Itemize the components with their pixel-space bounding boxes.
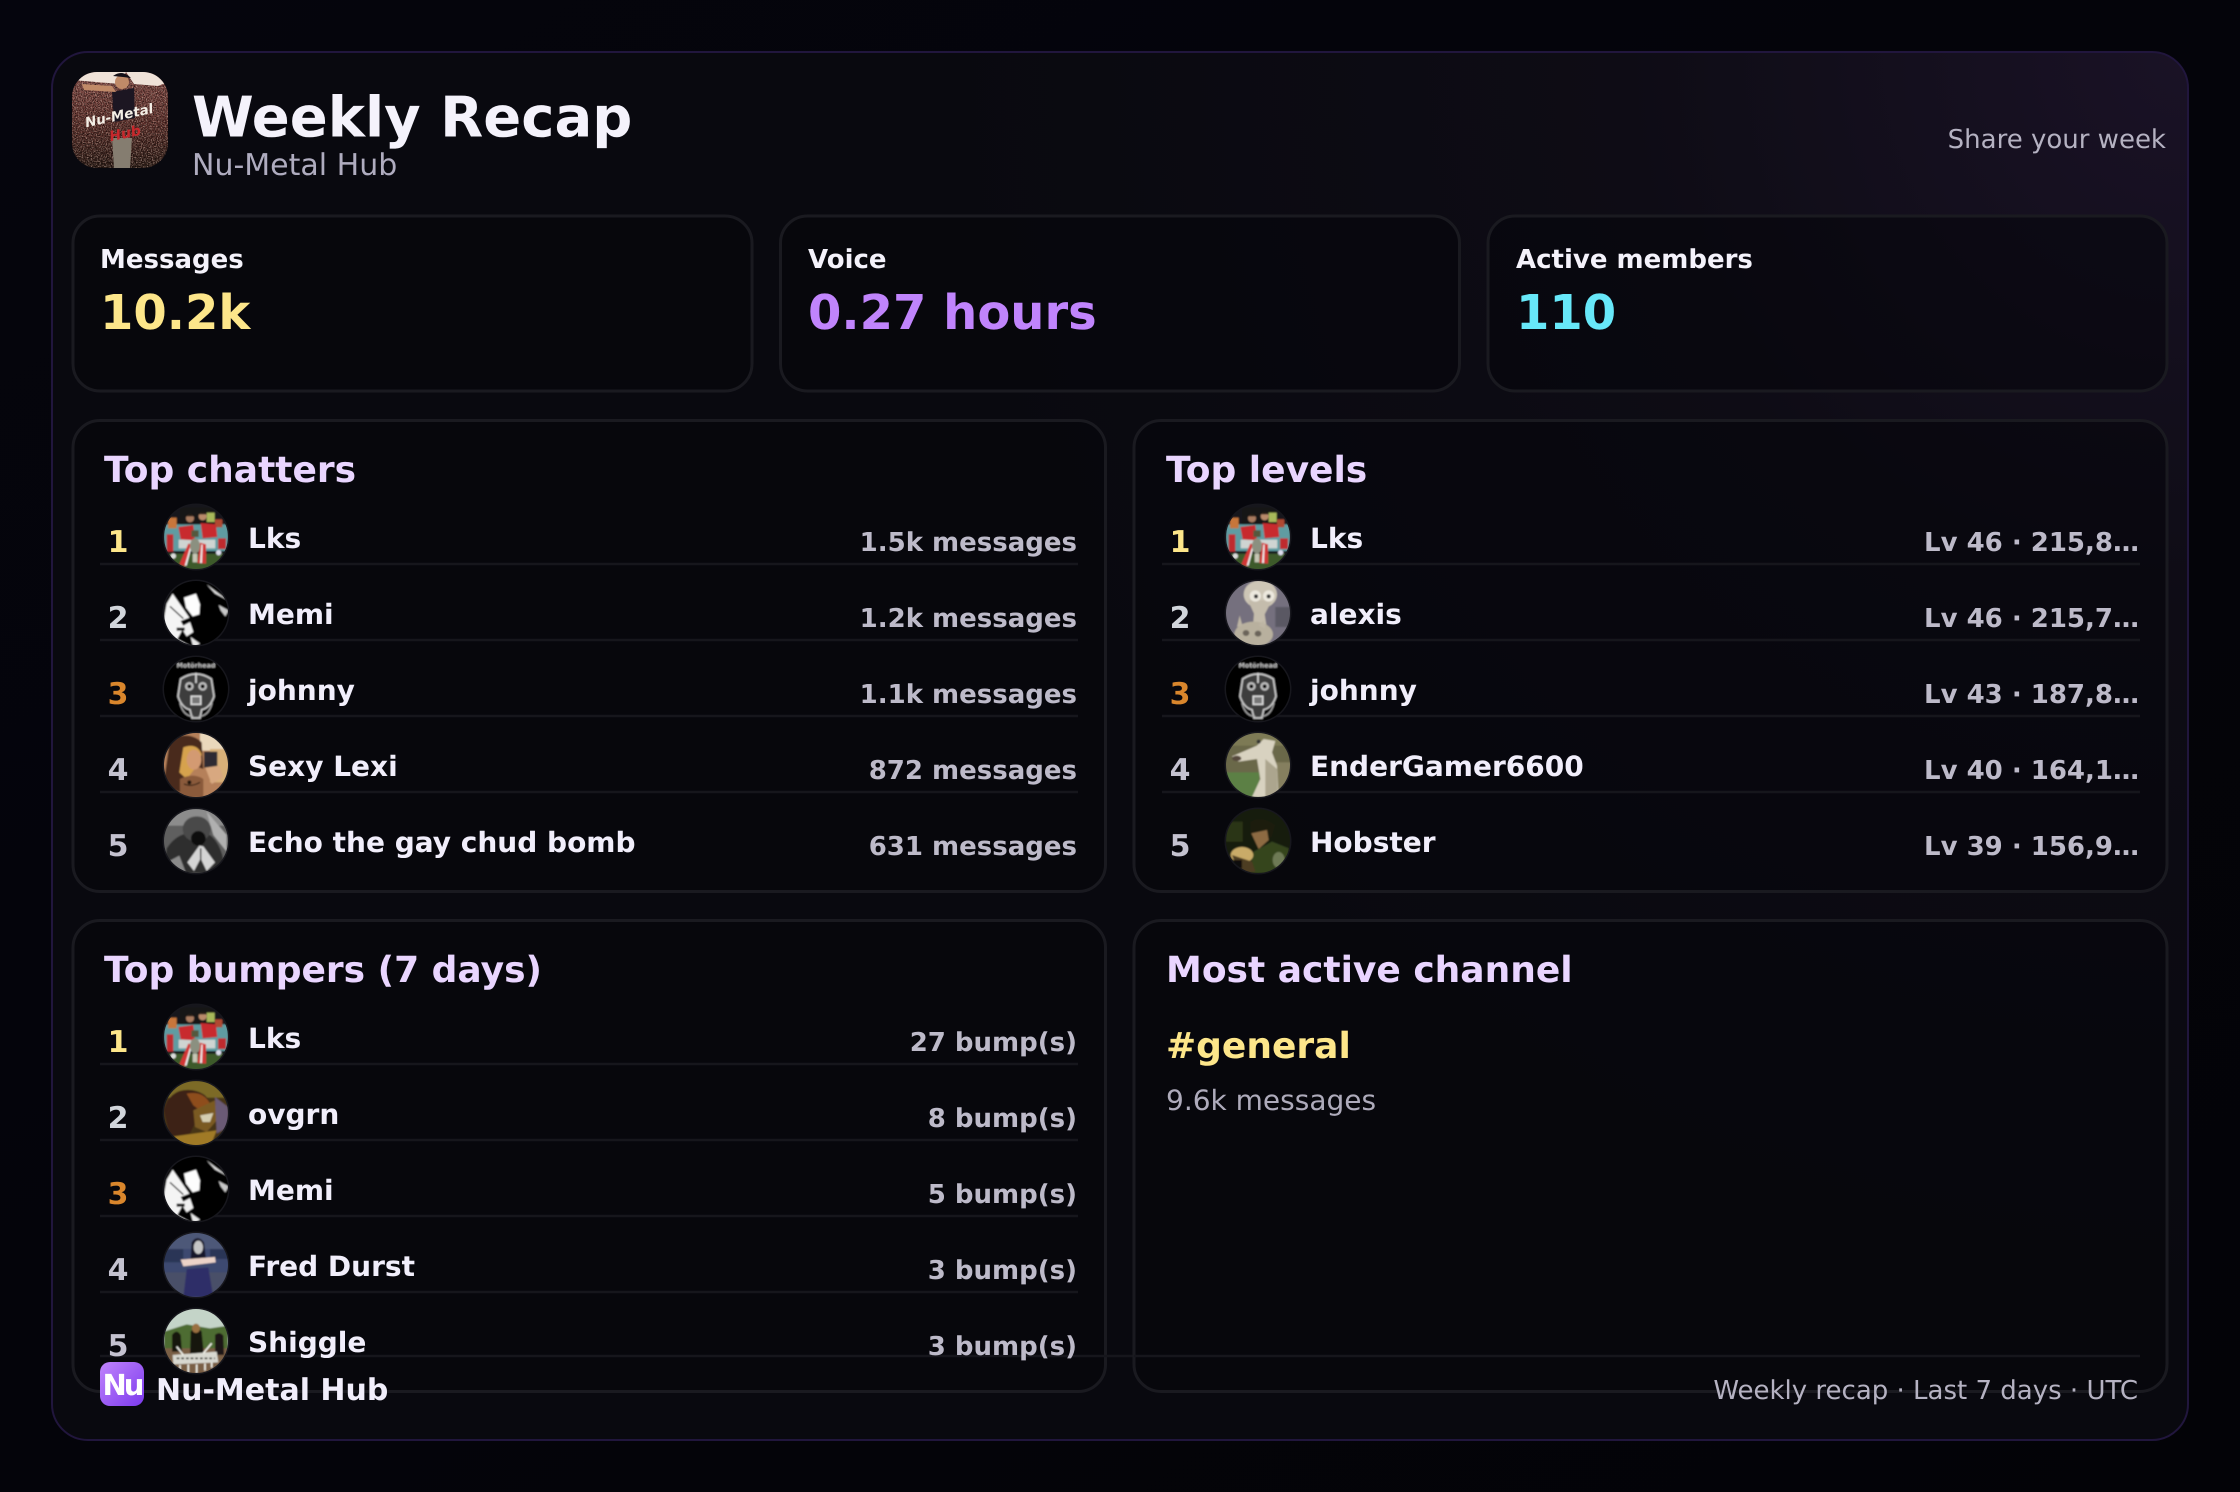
row: Memi: 3 (108, 1177, 128, 1212)
stat card: messages: Messages (100, 245, 244, 275)
row: Sexy Lexi: 872 messages (869, 756, 1077, 786)
row: alexis: alexis (1310, 598, 1402, 631)
row: Memi: Memi (248, 598, 334, 631)
row: Lks: 1.5k messages (860, 528, 1077, 558)
row: Shiggle: Shiggle (248, 1326, 366, 1359)
row: ovgrn: 8 bump(s) (928, 1104, 1077, 1134)
panel: top bumpers (73, 920, 1134, 1392)
row: alexis: Lv 46 · 215,7… (1924, 604, 2139, 634)
stat card: voice (780, 216, 1460, 391)
row: Memi: 2 (108, 601, 128, 636)
row: Lks (108, 1001, 1077, 1074)
row: Hobster: Hobster (1310, 826, 1436, 859)
row: johnny: 1.1k messages (860, 680, 1077, 710)
row: johnny: johnny (247, 674, 355, 707)
row: johnny (1170, 653, 2139, 725)
row: Sexy Lexi: Sexy Lexi (248, 750, 398, 783)
row: Echo the gay chud bomb: Echo the gay chud bomb (248, 826, 636, 859)
row: Memi (108, 577, 1077, 649)
row: EnderGamer6600: Lv 40 · 164,1… (1924, 756, 2139, 786)
row: Shiggle: 3 bump(s) (928, 1332, 1077, 1362)
brand name: Nu-Metal Hub (156, 1373, 388, 1408)
row: Memi: Memi (248, 1174, 334, 1207)
stat card: voice: 0.27 hours (808, 285, 1097, 341)
row: Echo the gay chud bomb: 5 (108, 829, 128, 864)
row: Lks: Lv 46 · 215,8… (1924, 528, 2139, 558)
row: Fred Durst: 3 bump(s) (928, 1256, 1077, 1286)
panel: top bumpers: Top bumpers (7 days) (104, 950, 542, 991)
row: Fred Durst (108, 1229, 1077, 1301)
row: johnny (108, 653, 1077, 725)
row: Fred Durst: 4 (108, 1253, 128, 1288)
row: EnderGamer6600: EnderGamer6600 (1310, 750, 1584, 783)
stat card: messages (73, 216, 752, 391)
row: Memi: 1.2k messages (860, 604, 1077, 634)
row: EnderGamer6600: 4 (1170, 753, 1190, 788)
panel: most active channel (1134, 920, 2167, 1392)
subtitle: Nu-Metal Hub (192, 148, 397, 183)
row: Sexy Lexi: 4 (108, 753, 128, 788)
row: johnny: johnny (1309, 674, 1417, 707)
row: Sexy Lexi (108, 729, 1077, 801)
row: ovgrn (108, 1077, 1077, 1149)
panel: top chatters (73, 420, 1106, 892)
footer (100, 1362, 2138, 1408)
row: Lks: 27 bump(s) (910, 1028, 1077, 1058)
row: alexis (1170, 577, 2139, 649)
row: Lks: 1 (108, 1025, 128, 1060)
panel: top levels: Top levels (1166, 450, 1367, 491)
row: alexis: 2 (1170, 601, 1190, 636)
row: Lks: 1 (108, 525, 128, 560)
stat card: active members (1488, 216, 2167, 391)
icon: server logo: Hub (108, 123, 142, 145)
row: Memi: 5 bump(s) (928, 1180, 1077, 1210)
icon: Nu badge (100, 1362, 144, 1406)
stat card: active members: Active members (1516, 245, 1753, 275)
stat card: voice: Voice (808, 245, 887, 275)
row: Shiggle (108, 1305, 1077, 1377)
header (72, 72, 2166, 183)
stat card: messages: 10.2k (100, 285, 251, 341)
row: Lks: Lks (1310, 522, 1363, 555)
share label: Share your week (1948, 125, 2166, 155)
row: EnderGamer6600 (1170, 729, 2139, 801)
row: Echo the gay chud bomb (108, 805, 1077, 877)
row: Hobster: Lv 39 · 156,9… (1924, 832, 2139, 862)
footer note: Weekly recap · Last 7 days · UTC (1713, 1376, 2138, 1406)
title: Weekly Recap (192, 86, 632, 150)
row: johnny: 3 (1170, 677, 1190, 712)
stat card: active members: 110 (1516, 285, 1616, 341)
row: johnny: 3 (108, 677, 128, 712)
channel count: 9.6k messages (1166, 1084, 1376, 1117)
row: Lks: 1 (1170, 525, 1190, 560)
icon: server logo: Nu-Metal (84, 101, 155, 131)
row: Echo the gay chud bomb: 631 messages (869, 832, 1077, 862)
row: Hobster (1170, 805, 2139, 877)
channel name: #general (1166, 1026, 1351, 1067)
row: Lks (1170, 501, 2139, 574)
row: Hobster: 5 (1170, 829, 1190, 864)
row: Fred Durst: Fred Durst (248, 1250, 415, 1283)
row: Lks: Lks (248, 1022, 301, 1055)
row: Shiggle: 5 (108, 1329, 128, 1364)
panel: top chatters: Top chatters (104, 450, 356, 491)
row: Lks: Lks (248, 522, 301, 555)
panel: top levels (1134, 420, 2167, 892)
panel: most active channel: Most active channel (1166, 950, 1573, 991)
icon: Nu badge: Nu (103, 1368, 143, 1402)
row: Memi (108, 1153, 1077, 1225)
icon: server logo (72, 72, 168, 168)
row: Lks (108, 501, 1077, 574)
row: ovgrn: ovgrn (248, 1098, 339, 1131)
row: ovgrn: 2 (108, 1101, 128, 1136)
row: johnny: Lv 43 · 187,8… (1924, 680, 2139, 710)
